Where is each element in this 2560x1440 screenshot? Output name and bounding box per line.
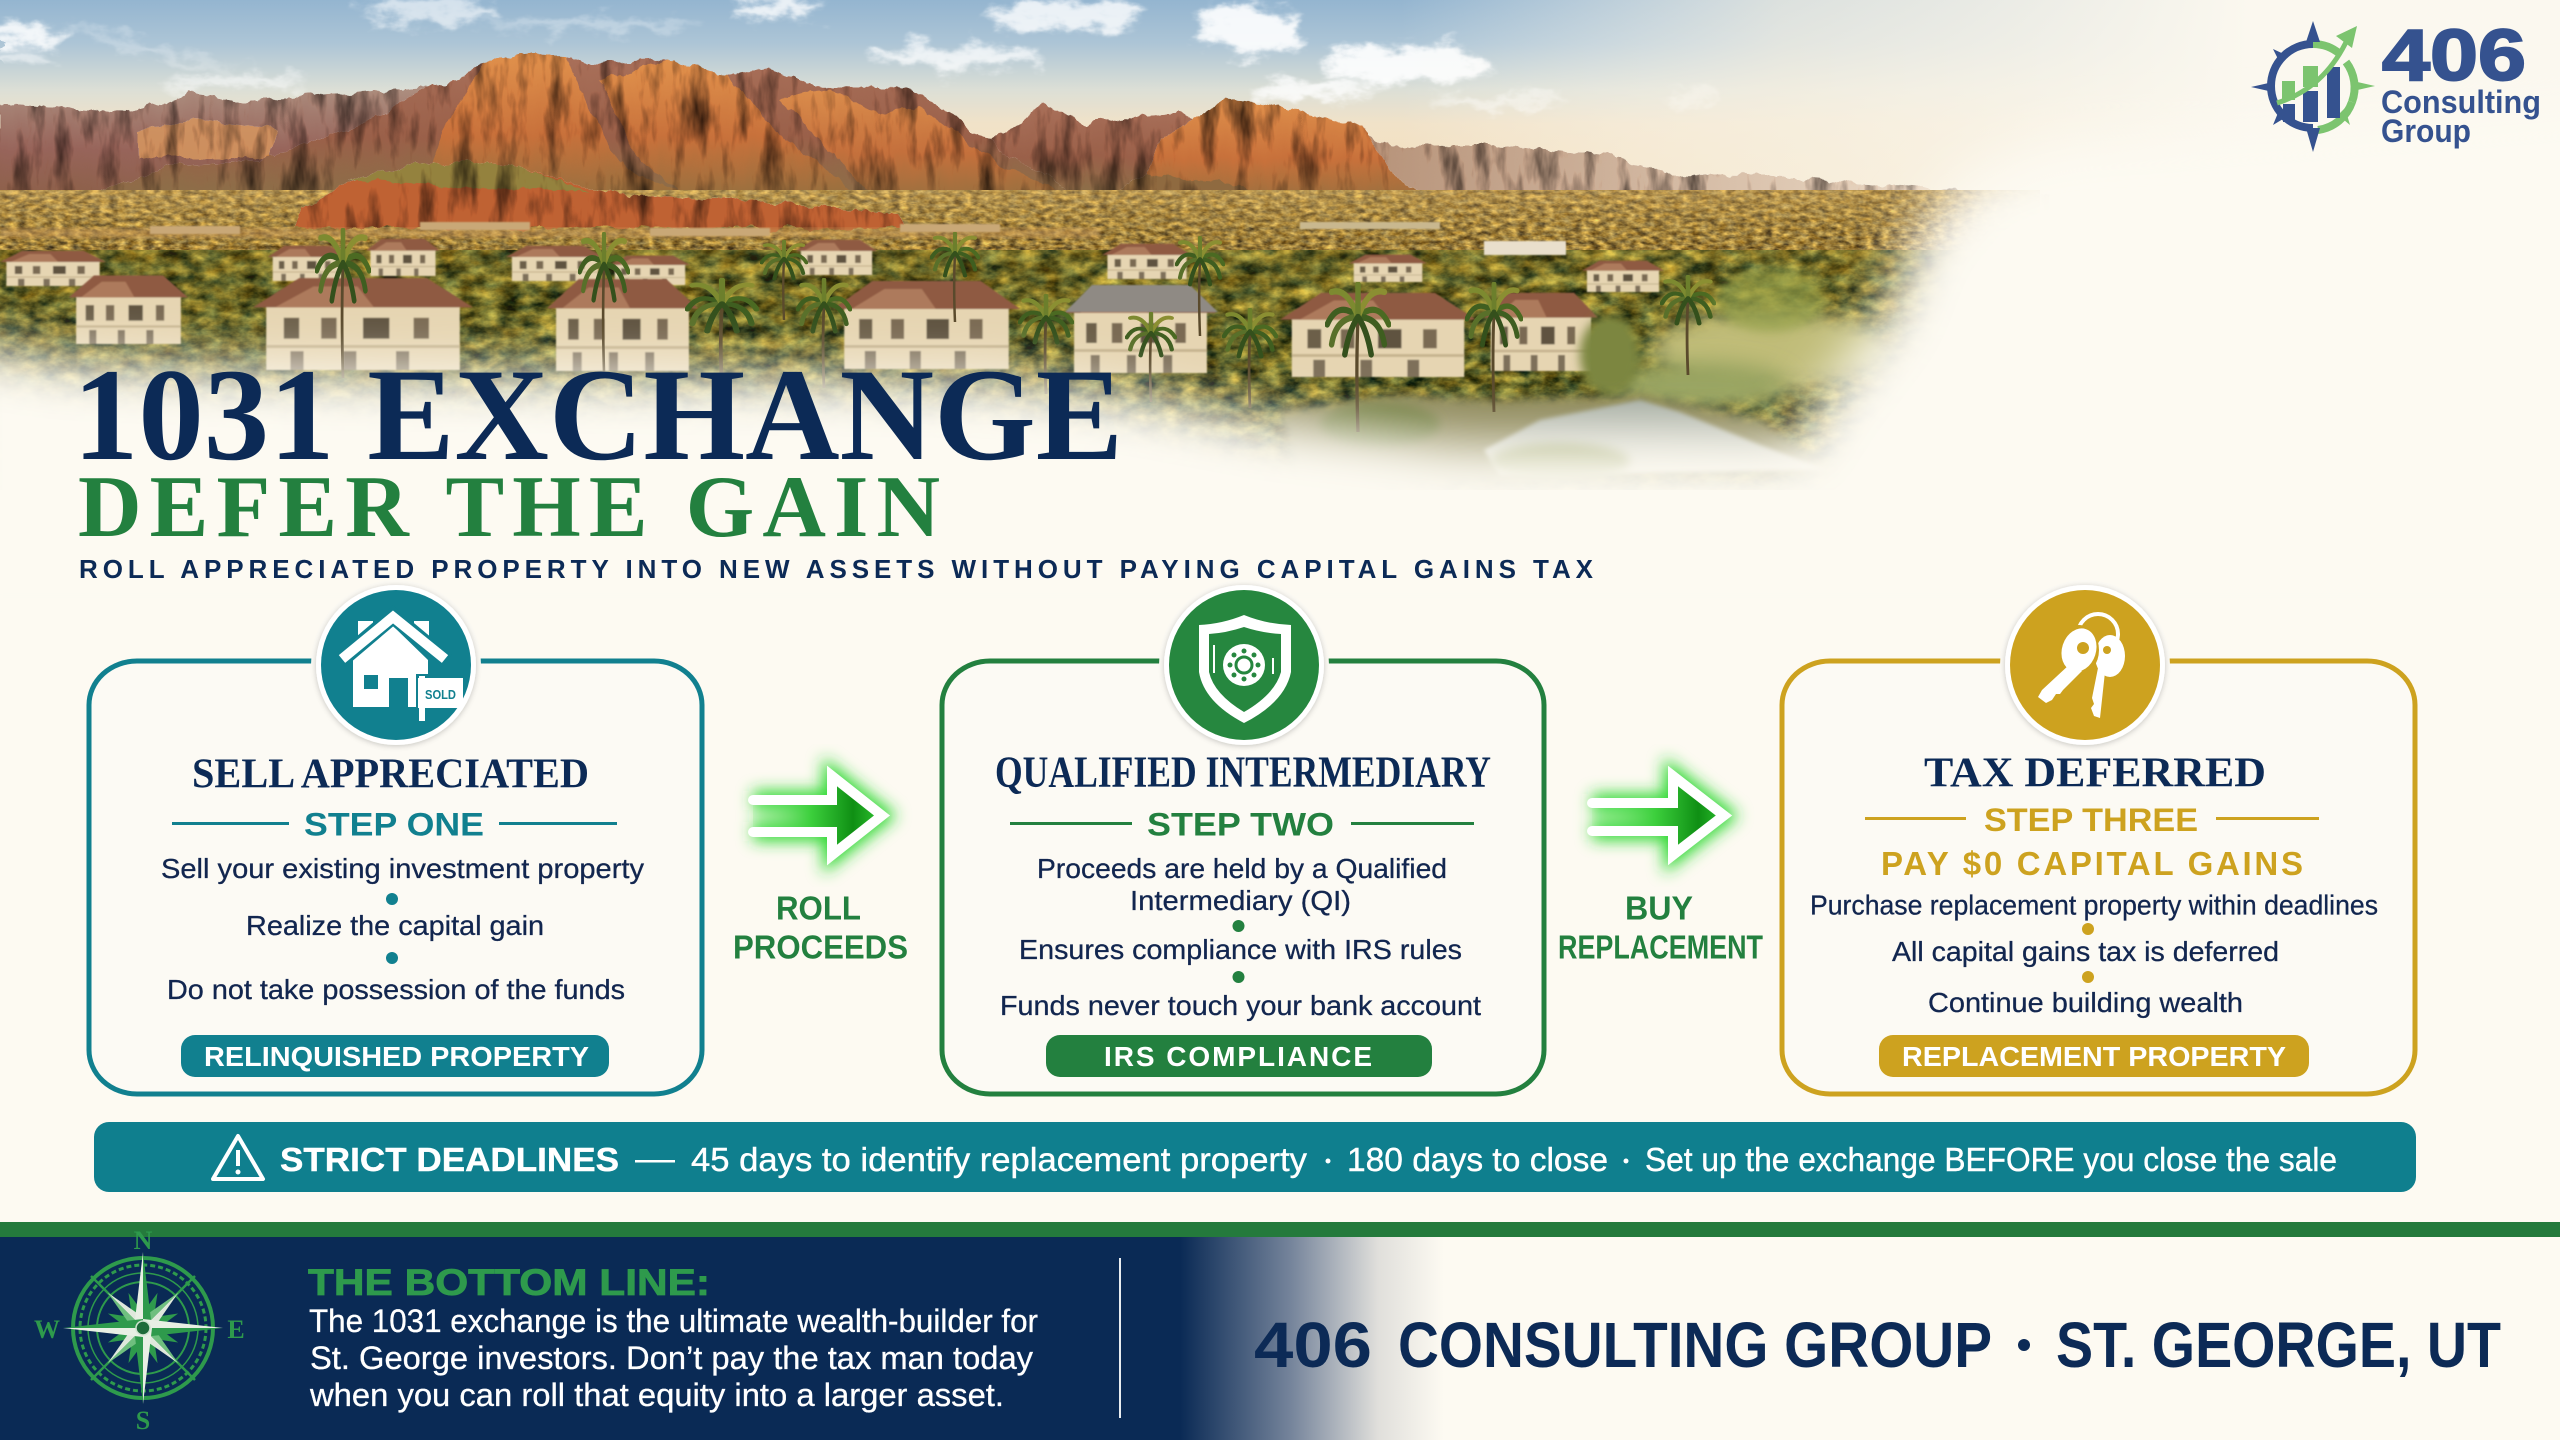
step label: STEP THREE [1984, 802, 2198, 838]
bullet list: Continue building wealth [1928, 987, 2243, 1018]
company and location: ST. GEORGE, UT [2056, 1309, 2501, 1381]
bullet list: Purchase replacement property within deadlines [1810, 890, 2378, 920]
text block: the bottom line [308, 1262, 1038, 1413]
step label [1865, 802, 2319, 838]
pill: relinquished property: RELINQUISHED PROPERTY [204, 1041, 589, 1072]
title: 1031 EXCHANGE [73, 341, 1123, 488]
arrow label: buy replacement [1558, 890, 1763, 966]
banner: strict deadlines: 45 days to identify replacement property [691, 1141, 1308, 1178]
text block: the bottom line: The 1031 exchange is the ultimate wealth-builder for [309, 1303, 1038, 1339]
icon: warning triangle [213, 1136, 263, 1179]
subtitle: defer the gain: DEFER THE GAIN [78, 459, 940, 556]
icon: compass rose: E [227, 1315, 245, 1344]
pill: replacement property: REPLACEMENT PROPERTY [1902, 1041, 2286, 1072]
icon: house with sold sign: SOLD [425, 687, 456, 702]
foreground butte [295, 161, 905, 228]
logo: 406 Consulting Group: 406 [2382, 16, 2526, 96]
bullet list: Ensures compliance with IRS rules [1019, 934, 1462, 965]
step label [1010, 806, 1474, 842]
bullet list: Sell your existing investment property [161, 853, 644, 884]
palm trees [317, 230, 1825, 432]
bullet list: Do not take possession of the funds [167, 974, 625, 1005]
bullet list: All capital gains tax is deferred [1892, 936, 2279, 967]
company and location: CONSULTING GROUP [1398, 1309, 1992, 1381]
callout: pay $0 capital gains: PAY $0 CAPITAL GAINS [1881, 845, 2303, 882]
vegetation and town band [0, 190, 2040, 490]
bullet list: Funds never touch your bank account [1000, 990, 1481, 1021]
icon: compass rose: W [34, 1315, 60, 1344]
icon: shield with vault dial [1164, 585, 1324, 745]
text block: the bottom line: St. George investors. Don’t pay the tax man today [310, 1340, 1033, 1376]
arrow label: buy replacement: REPLACEMENT [1558, 928, 1763, 966]
icon: compass rose: N [134, 1226, 153, 1255]
back row houses [0, 222, 1664, 292]
arrow: roll proceeds [753, 776, 882, 855]
bullet list [1000, 853, 1481, 1021]
icon: compass rose: S [136, 1406, 150, 1435]
footer band [0, 1226, 2501, 1440]
banner: strict deadlines [94, 1122, 2416, 1192]
icon: house with sold sign [316, 585, 476, 745]
logo: 406 Consulting Group [2251, 16, 2541, 152]
tagline: ROLL APPRECIATED PROPERTY INTO NEW ASSETS WITHOUT PAYING CAPITAL GAINS TAX [79, 554, 1594, 584]
icon: keys [2005, 585, 2165, 745]
company and location [1254, 1309, 2501, 1381]
logo: 406 Consulting Group: Consulting [2381, 84, 2541, 120]
banner: strict deadlines: Set up the exchange BEFORE you close the sale [1645, 1141, 2337, 1178]
front row houses [69, 276, 1598, 377]
golf course and lake [1280, 310, 1890, 490]
bullet list: Proceeds are held by a Qualified [1037, 853, 1447, 884]
step label [172, 806, 617, 842]
hero photo: red-rock landscape with neighbourhood [0, 0, 2560, 620]
heading: SELL APPRECIATED [192, 752, 589, 798]
bullet list: Intermediary (QI) [1130, 885, 1351, 916]
heading: QUALIFIED INTERMEDIARY [995, 748, 1491, 796]
pill: replacement property [1879, 1035, 2309, 1077]
heading: TAX DEFERRED [1924, 750, 2266, 796]
banner: strict deadlines: STRICT DEADLINES [280, 1141, 619, 1178]
bullet list [161, 853, 644, 1005]
bullet list: Realize the capital gain [246, 910, 544, 941]
pill: IRS compliance: IRS COMPLIANCE [1104, 1041, 1372, 1072]
arrow label: buy replacement: BUY [1625, 890, 1693, 926]
bullet list [1810, 890, 2378, 1018]
arrow label: roll proceeds [733, 890, 908, 966]
panel: step one [89, 580, 702, 1094]
step label: STEP TWO [1147, 806, 1334, 842]
photo fade into cream [0, 100, 2560, 620]
text block: the bottom line: when you can roll that equity into a larger asset. [309, 1377, 1004, 1413]
icon: compass rose [34, 1226, 245, 1435]
logo: 406 Consulting Group: Group [2381, 113, 2471, 149]
pill: relinquished property [181, 1035, 609, 1077]
banner: strict deadlines: 180 days to close [1347, 1141, 1608, 1178]
company and location: 406 [1254, 1309, 1372, 1381]
main red-rock massif [60, 54, 1440, 205]
panel: step two [942, 580, 1544, 1094]
green divider bar [0, 1222, 2560, 1237]
logo compass mark [2251, 21, 2375, 152]
text block: the bottom line: THE BOTTOM LINE: [308, 1262, 710, 1303]
arrow: buy replacement [1592, 776, 1724, 855]
arrow label: roll proceeds: PROCEEDS [733, 928, 908, 966]
arrow label: roll proceeds: ROLL [776, 890, 861, 926]
far mountain range [0, 86, 2047, 215]
step label: STEP ONE [304, 806, 484, 842]
pill: IRS compliance [1046, 1035, 1432, 1077]
panel: step three [1782, 580, 2415, 1094]
